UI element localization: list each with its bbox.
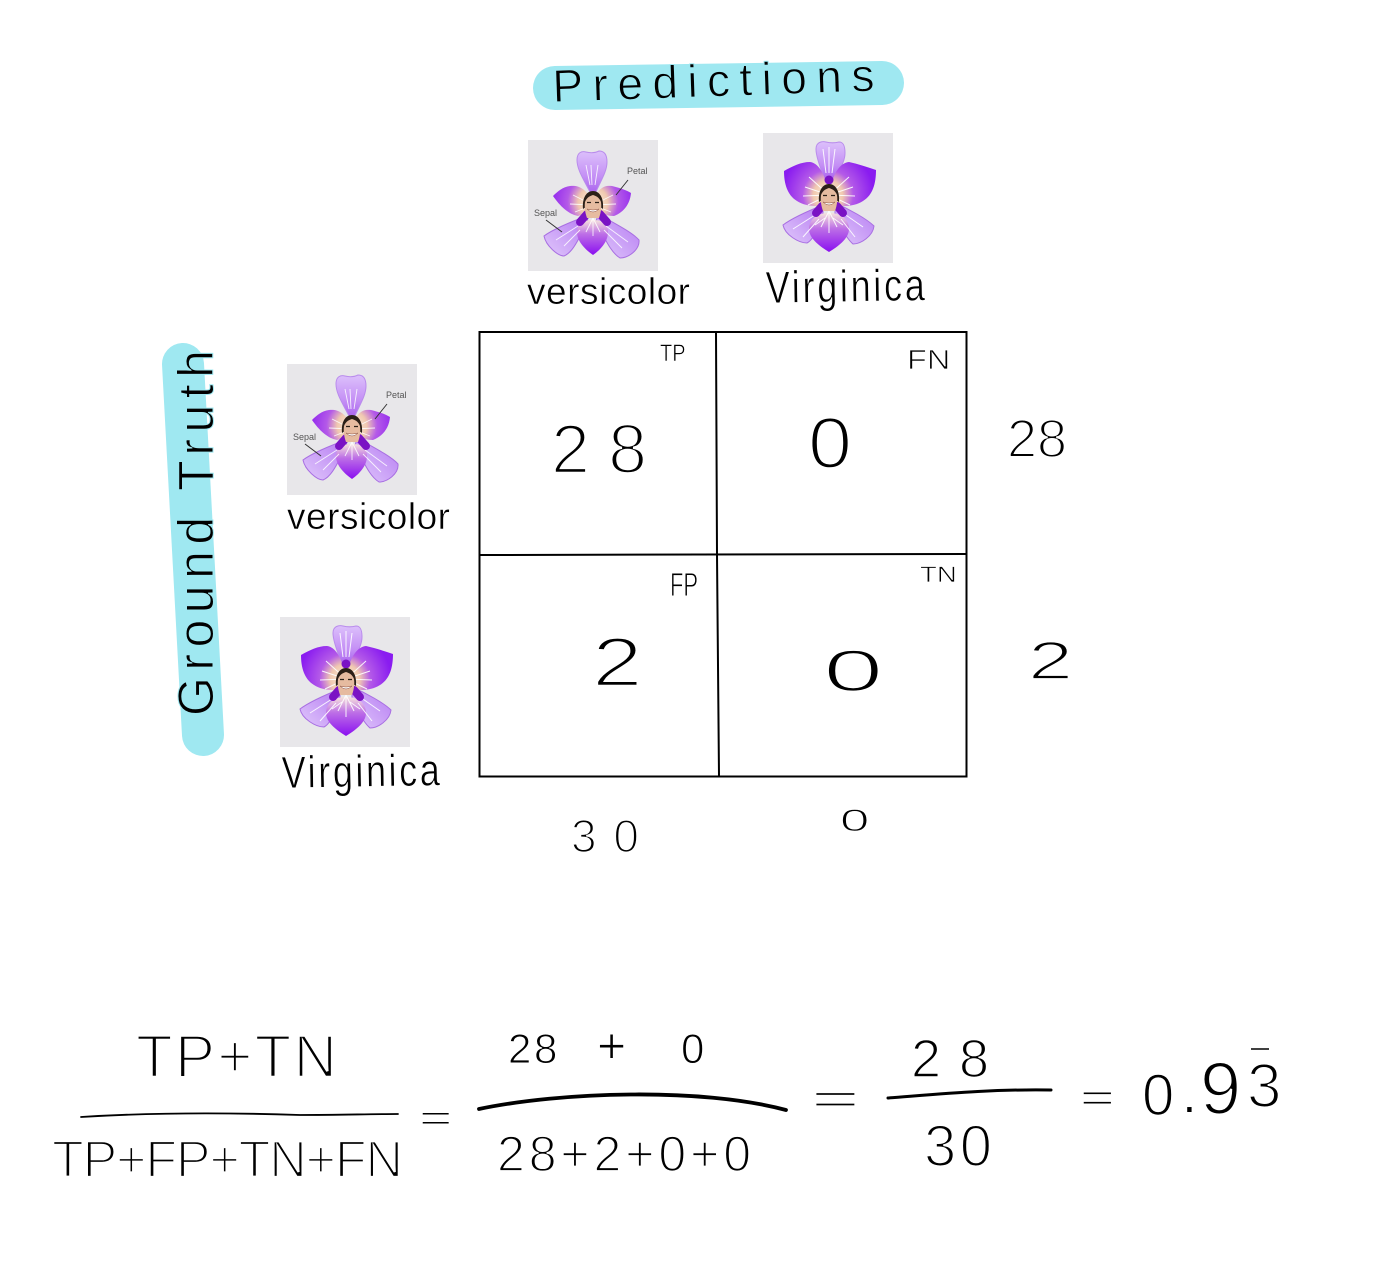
tag: FN: FN [907,345,950,375]
icon: virginica flower, row header [280,617,410,747]
icon: versicolor flower, row header [287,364,417,495]
column total: 30: 30 [571,810,639,862]
denominator: 28+2+0+0: 28+2+0+0 [497,1126,751,1182]
result: 0.93 repeating: . [1183,1070,1196,1122]
cell: true positive count: 28 [551,410,647,488]
row total: 28: 28 [1007,409,1067,469]
confusion matrix [479,332,966,776]
tag: TP: TP [660,339,686,366]
equals sign 2: = [811,1076,860,1122]
denominator: TP+FP+TN+FN: TP+FP+TN+FN [52,1131,403,1189]
numerator: 28 + 0: 8 [534,1025,557,1072]
column total: 0: 0 [840,804,869,838]
row total: 2: 2 [1028,630,1073,691]
equals sign 1: = [419,1099,452,1138]
cell: true negative count: 0 [823,638,884,704]
result: 0.93 repeating [1142,1047,1281,1130]
equals sign 3: = [1080,1076,1115,1118]
tag: TN: TN [920,563,957,587]
numerator: 28 + 0: + [597,1018,626,1074]
denominator: 30: 30 [924,1114,992,1179]
numerator: 28: 28 [911,1029,989,1089]
accuracy formula [52,1018,1281,1189]
heading: Predictions: Predictions [552,49,875,112]
matrix grid [479,332,966,776]
cell: false negative count: 0 [808,403,852,484]
result: 0.93 repeating: 0 [1142,1063,1174,1128]
label: Virginica, column: Virginica [765,259,925,313]
icon: versicolor flower, column header [528,140,658,271]
numerator: TP+TN: TP+TN [136,1023,337,1090]
cell: false positive count: 2 [592,624,643,702]
tag: FP: FP [670,567,698,603]
label: versicolor, column: versicolor [527,271,690,312]
label: Virginica, row: Virginica [281,744,440,798]
numerator: 28 + 0: 2 [508,1025,531,1072]
icon: virginica flower, column header [763,133,893,263]
result: 0.93 repeating: 3 [1247,1052,1281,1121]
label: versicolor, row: versicolor [287,496,450,537]
heading: Ground Truth: Ground Truth [168,350,224,716]
numerator: 28 + 0: 0 [681,1025,704,1072]
result: 0.93 repeating: 9 [1200,1047,1241,1130]
fraction bars [81,1090,1051,1117]
